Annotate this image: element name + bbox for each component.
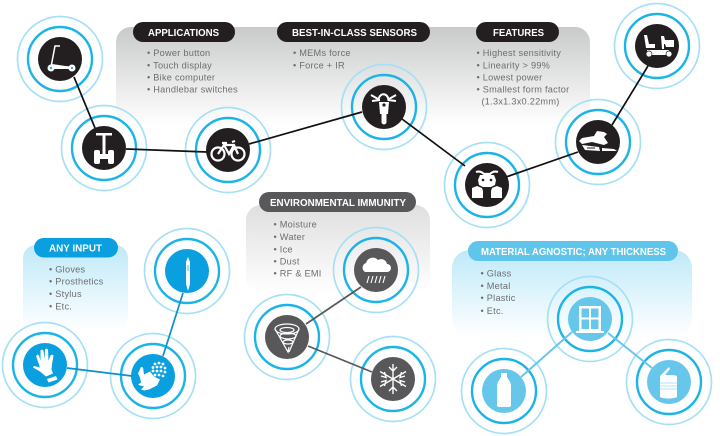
panel: environmental background	[246, 205, 430, 293]
panel: material background	[452, 250, 692, 337]
text block: features list: • Linearity > 99%	[476, 60, 550, 70]
text block: any input list: • Prosthetics	[49, 276, 104, 286]
heading: any input: ANY INPUT	[49, 242, 103, 254]
heading: material agnostic	[468, 241, 678, 261]
text block: material list: • Plastic	[480, 293, 516, 303]
heading: features	[476, 22, 559, 42]
node: mobility scooter	[614, 4, 700, 88]
heading: any input	[34, 238, 118, 258]
text block: applications list	[147, 48, 238, 94]
text block: environmental list: • RF & EMI	[274, 268, 322, 278]
node: stylus	[144, 228, 230, 314]
text block: environmental list: • Moisture	[274, 220, 317, 230]
node: prosthetic hand	[110, 334, 196, 418]
node: motorcycle	[342, 64, 426, 150]
text block: sensors list	[293, 48, 351, 70]
text block: features list: (1.3x1.3x0.22mm)	[482, 96, 560, 106]
text block: sensors list: • MEMs force	[293, 48, 351, 58]
text block: applications list: • Power button	[147, 48, 210, 58]
node: rain cloud	[334, 228, 418, 312]
connector: input chain	[67, 293, 183, 376]
connector: vehicle chain	[74, 66, 648, 177]
text block: material list	[480, 268, 516, 316]
node: bicycle	[186, 108, 270, 192]
node: segway	[62, 106, 146, 190]
panel: any input background	[23, 245, 128, 331]
node: can	[626, 340, 712, 424]
node: bottle	[462, 348, 546, 434]
text block: environmental list: • Ice	[274, 244, 293, 254]
node: snowmobile	[556, 100, 640, 184]
text block: environmental list: • Water	[274, 232, 305, 242]
heading: best-in-class sensors: BEST-IN-CLASS SENSORS	[292, 27, 417, 39]
connector: environment chain	[306, 287, 372, 372]
heading: features: FEATURES	[493, 27, 544, 39]
text block: applications list: • Bike computer	[147, 72, 215, 82]
text block: environmental list: • Dust	[274, 256, 300, 266]
text block: applications list: • Touch display	[147, 60, 212, 70]
connector: material chain	[521, 332, 652, 377]
text block: features list	[476, 48, 569, 106]
text block: features list: • Lowest power	[476, 72, 542, 82]
text block: applications list: • Handlebar switches	[147, 84, 238, 94]
heading: applications	[133, 22, 235, 42]
text block: material list: • Glass	[480, 268, 512, 278]
node: scooter	[18, 16, 102, 102]
heading: environmental immunity	[259, 192, 416, 212]
text block: material list: • Metal	[480, 281, 510, 291]
text block: any input list: • Etc.	[49, 302, 72, 312]
heading: environmental immunity: ENVIRONMENTAL IMMUNITY	[270, 197, 406, 209]
text block: sensors list: • Force + IR	[293, 60, 345, 70]
node: window	[548, 276, 632, 362]
node: atv	[444, 142, 530, 228]
text block: features list: • Highest sensitivity	[476, 48, 561, 58]
text block: material list: • Etc.	[480, 306, 504, 316]
panel: top grey background	[116, 27, 590, 125]
node: glove	[2, 322, 88, 408]
heading: best-in-class sensors	[277, 22, 430, 42]
heading: applications: APPLICATIONS	[148, 27, 219, 39]
heading: material agnostic: MATERIAL AGNOSTIC; ANY THICKNESS	[481, 246, 666, 258]
text block: features list: • Smallest form factor	[476, 84, 569, 94]
node: snowflake	[350, 336, 436, 422]
text block: environmental list	[274, 220, 322, 278]
node: tornado	[244, 294, 330, 380]
text block: any input list: • Gloves	[49, 264, 86, 274]
text block: any input list	[49, 264, 104, 312]
text block: any input list: • Stylus	[49, 289, 82, 299]
